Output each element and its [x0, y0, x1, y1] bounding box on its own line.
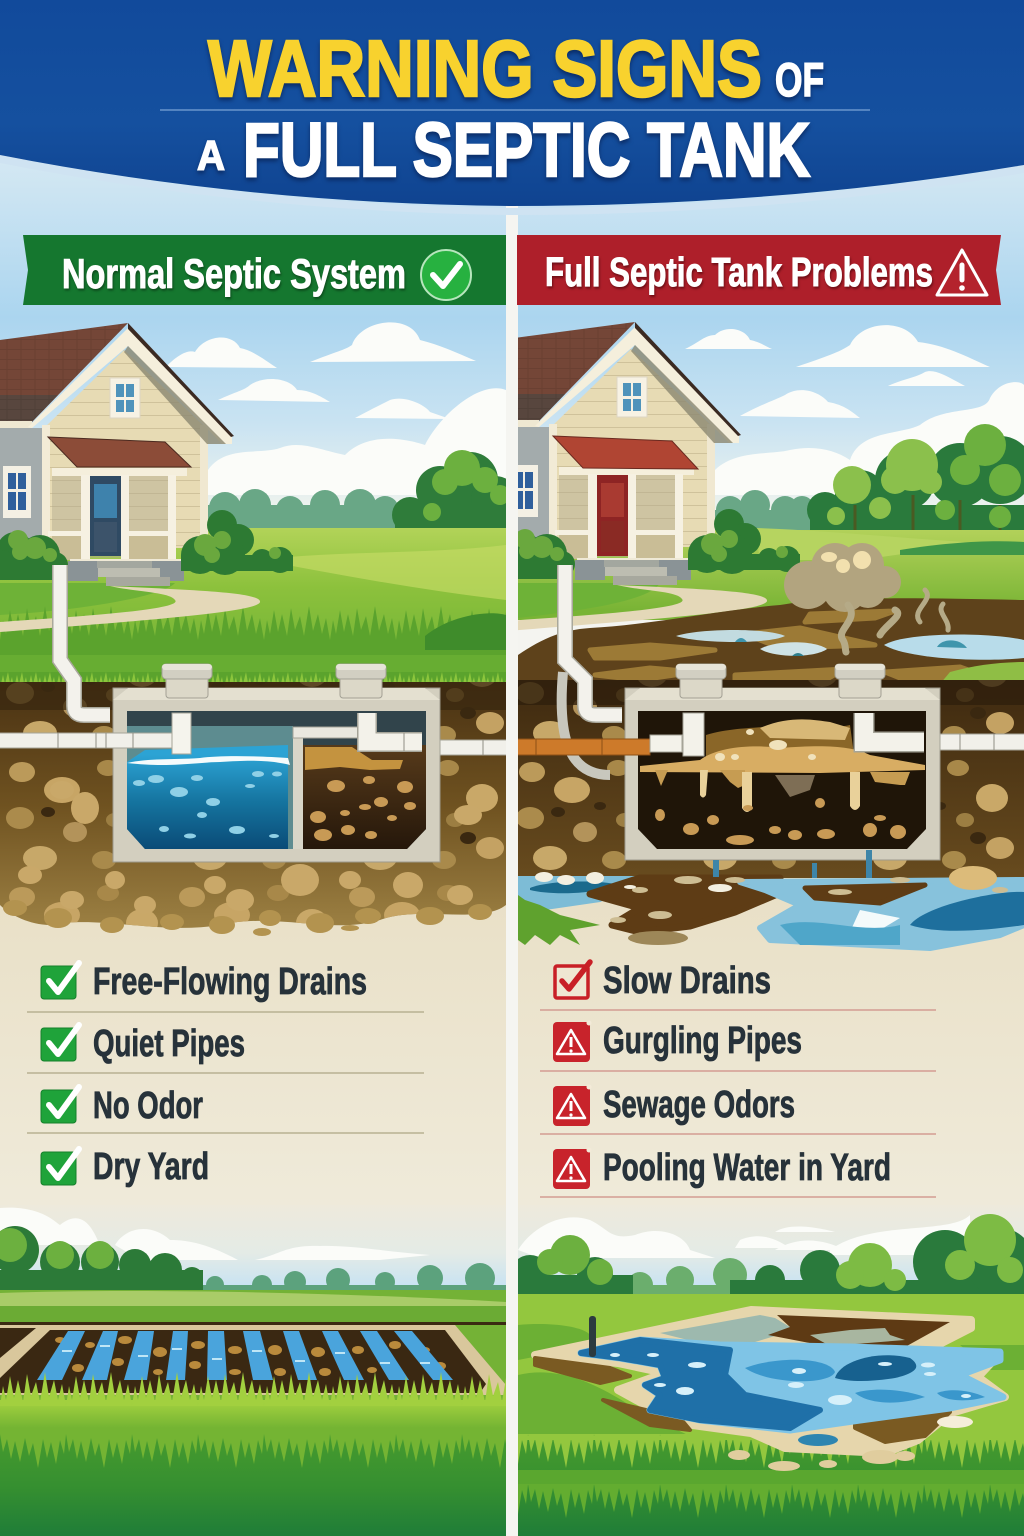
septic tank: normal	[0, 565, 508, 862]
item: slow drains: Slow Drains	[603, 960, 771, 1002]
septic tank: failing	[516, 565, 1024, 878]
bottom scene: drain field	[0, 1205, 506, 1536]
checklist panel backgrounds	[0, 860, 1024, 1220]
stake	[589, 1316, 596, 1357]
tree clump	[0, 1226, 203, 1292]
standing water	[581, 1340, 1003, 1430]
grey water	[660, 1315, 795, 1345]
inlet downpipe	[60, 565, 110, 715]
house	[494, 322, 800, 631]
outlet pipes	[864, 713, 1024, 750]
water chamber	[127, 726, 293, 849]
bottom scene: pooling water	[510, 1205, 1024, 1536]
tree clump	[807, 424, 1024, 541]
access cover	[162, 664, 212, 698]
pale scum	[810, 1328, 905, 1346]
item: pooling water in yard	[553, 1147, 891, 1189]
item: sewage odors: Sewage Odors	[603, 1084, 795, 1126]
item: free-flowing drains	[41, 961, 367, 1003]
muddy soil	[535, 1358, 950, 1442]
list: normal signs	[27, 961, 424, 1188]
icon: warning triangle	[937, 250, 987, 295]
distant treeline	[715, 490, 810, 530]
tree clump	[392, 450, 506, 528]
inlet pipe	[0, 713, 191, 754]
banner: normal septic system	[23, 235, 506, 305]
clouds	[518, 1215, 970, 1258]
tank interior	[127, 711, 426, 849]
tree clump: right	[730, 1214, 1024, 1296]
baffle and outlet pipes	[293, 713, 508, 755]
header rule	[160, 109, 870, 111]
item: no odor	[41, 1085, 203, 1127]
soil layers	[518, 680, 1024, 878]
lawn	[518, 528, 1024, 620]
tank interior	[638, 711, 926, 849]
lawn	[0, 528, 506, 688]
inlet pipes	[516, 713, 704, 756]
stones	[728, 1416, 973, 1471]
tree clump: left	[510, 1235, 633, 1297]
sludge chamber	[303, 745, 426, 849]
banner: full septic tank problems	[517, 235, 1001, 305]
panel: full septic tank problems	[494, 160, 1024, 948]
sewage odor cloud	[784, 543, 948, 652]
item: dry yard	[41, 1146, 209, 1188]
sewage spills	[518, 866, 1024, 948]
foreground grass	[0, 1372, 506, 1536]
soil layers	[0, 682, 506, 936]
item: no odor: No Odor	[93, 1085, 203, 1127]
title: line two: A	[197, 132, 225, 179]
icon: check badge	[421, 250, 471, 300]
banner: normal septic system: Normal Septic System	[62, 250, 406, 297]
foreground grass	[518, 1434, 1024, 1536]
item: sewage odors	[553, 1084, 795, 1126]
item: quiet pipes	[41, 1023, 245, 1065]
sky	[0, 160, 506, 530]
title: line one: WARNING SIGNS	[208, 24, 762, 113]
sludge and scum	[640, 719, 925, 845]
inlet downpipe	[565, 565, 622, 715]
clouds	[685, 325, 1024, 495]
item: gurgling pipes	[553, 1020, 802, 1062]
distant treeline	[200, 1263, 506, 1300]
field	[0, 1290, 506, 1400]
item: pooling water in yard: Pooling Water in Yard	[603, 1147, 891, 1189]
list: problem signs	[540, 960, 936, 1197]
puddles in yard	[676, 630, 1024, 660]
distant treeline	[625, 1258, 755, 1298]
contaminated yard	[518, 598, 1024, 684]
deep water	[581, 1340, 985, 1428]
distant treeline	[208, 489, 397, 528]
door	[90, 476, 121, 556]
small puddle	[798, 1434, 838, 1446]
item: dry yard: Dry Yard	[93, 1146, 209, 1188]
item: free-flowing drains: Free-Flowing Drains	[93, 961, 367, 1003]
clouds	[166, 322, 506, 495]
concrete shell	[113, 688, 440, 862]
header band	[0, 0, 1024, 215]
door	[597, 475, 628, 556]
panel: normal septic system	[0, 160, 519, 936]
clouds	[0, 1208, 430, 1260]
concrete shell	[625, 688, 940, 860]
sewage pool	[768, 1315, 950, 1347]
cracked pipe	[562, 672, 610, 775]
sky	[518, 160, 1024, 530]
field	[518, 1294, 1024, 1444]
title: line one: OF	[775, 53, 824, 106]
sky	[518, 1205, 1024, 1295]
drain field bed	[0, 1325, 506, 1395]
leaks through tank floor	[713, 850, 872, 878]
item: quiet pipes: Quiet Pipes	[93, 1023, 245, 1065]
access cover	[835, 664, 885, 698]
item: slow drains	[555, 960, 771, 1002]
title: line two: FULL SEPTIC TANK	[243, 108, 810, 193]
porch roof	[48, 437, 191, 467]
access cover	[676, 664, 726, 698]
porch roof	[553, 436, 698, 469]
sky	[0, 1205, 506, 1295]
house	[0, 323, 293, 632]
pool rim	[535, 1310, 1005, 1453]
access cover	[336, 664, 386, 698]
item: gurgling pipes: Gurgling Pipes	[603, 1020, 802, 1062]
centre divider	[506, 205, 518, 1536]
divider wall	[293, 727, 303, 849]
